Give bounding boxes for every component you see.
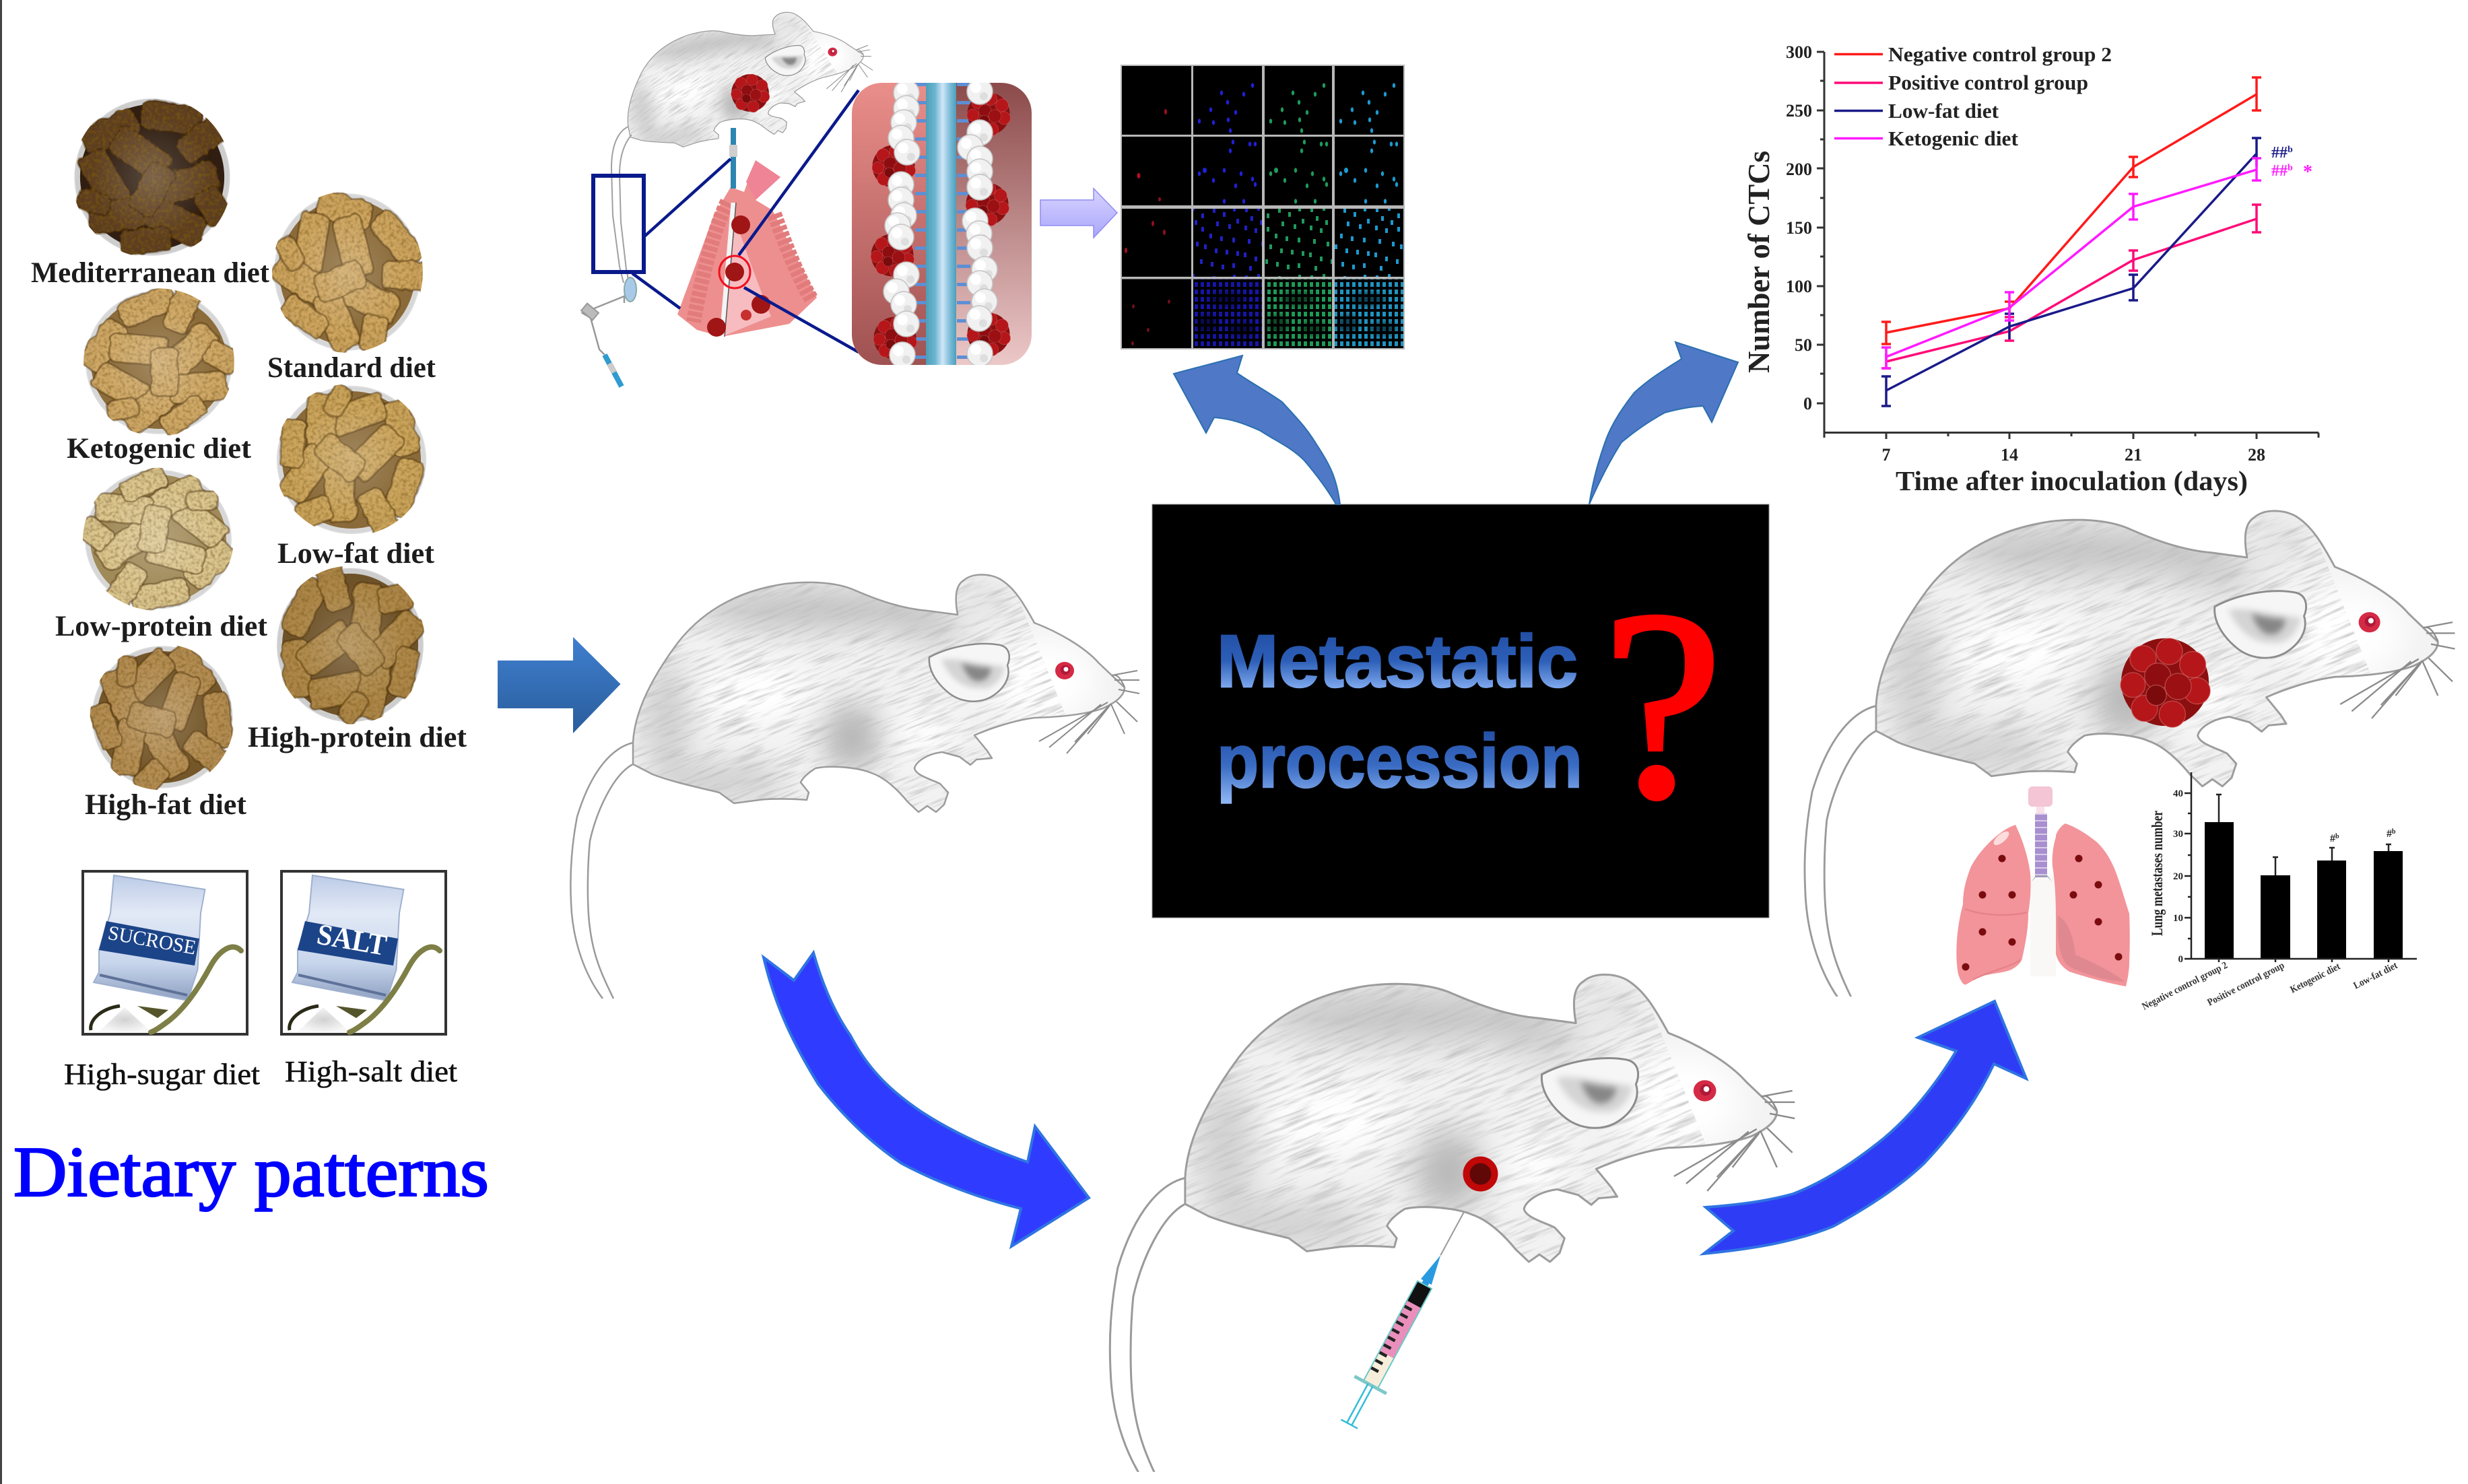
dish: Mediterranean diet [75, 98, 234, 256]
series: ketogenic diet [1881, 158, 2261, 368]
significance marks: # [2387, 828, 2392, 840]
x category labels: Low-fat diet [2352, 960, 2399, 992]
y axis tick labels: 150 [1786, 218, 1812, 238]
x axis tick labels: 14 [2001, 445, 2018, 465]
text: procession: procession [1217, 719, 1582, 803]
text: question mark: ? [1603, 555, 1723, 854]
trachea [2028, 786, 2053, 882]
icon: salt bag [281, 871, 446, 1034]
right lung [2053, 823, 2130, 986]
y axis tick labels: 200 [1786, 160, 1812, 179]
panel: CTC immunofluorescence micrographs [1121, 65, 1405, 349]
significance marks: b [2335, 833, 2339, 840]
panel: metastatic procession box [1152, 504, 1769, 918]
y tick labels: 0 [2178, 954, 2183, 965]
left border line [0, 0, 2, 1484]
left lung [1956, 825, 2031, 984]
antibody beads [883, 79, 997, 368]
significance marks: ## [2271, 162, 2288, 180]
significance marks: * [2303, 162, 2312, 182]
tumour on sampling mouse [731, 74, 770, 112]
significance marks: # [2330, 833, 2335, 844]
micrograph row 4 [1122, 279, 1403, 348]
chart: lung metastases bar chart [2141, 772, 2417, 1013]
y axis tick labels: 0 [1803, 394, 1812, 413]
series: low-fat diet [1881, 138, 2261, 406]
callout box on tail [593, 176, 644, 272]
significance marks [2330, 828, 2396, 844]
icon: sucrose bag: SUCROSE [106, 922, 198, 959]
text: Metastatic: Metastatic [1217, 620, 1578, 703]
significance marks [2271, 144, 2312, 182]
mouse: untreated centre-left [456, 381, 1139, 1023]
x category labels: Negative control group 2 [2141, 960, 2230, 1013]
x axis tick labels [1881, 445, 2265, 465]
label: High-salt diet: High-salt diet [285, 1055, 457, 1088]
error bars and axes [2184, 772, 2417, 962]
micrograph row 3 [1122, 209, 1403, 277]
icon: salt bag: SALT [314, 918, 389, 962]
x axis tick labels: 28 [2248, 445, 2265, 465]
dish: Standard diet [272, 192, 423, 353]
arrow: diets to mouse [498, 637, 621, 733]
tumour: large raspberry [2121, 638, 2210, 727]
significance marks: ## [2271, 144, 2288, 162]
mouse: blood sampling [509, 0, 901, 279]
label: High-protein diet: High-protein diet [248, 722, 467, 753]
chart legend: Negative control group 2 [1888, 42, 2112, 66]
y tick labels: 40 [2173, 788, 2183, 799]
chart axes [1817, 52, 2319, 439]
y axis tick labels: 300 [1786, 42, 1812, 62]
arrow: catheter to micrographs [1040, 189, 1117, 238]
micrograph row 2 [1122, 137, 1403, 205]
x category labels: Ketogenic diet [2289, 962, 2342, 996]
icon: lungs with metastases [1956, 786, 2130, 986]
x category labels: Positive control group [2206, 960, 2286, 1009]
label: Low-protein diet: Low-protein diet [55, 611, 268, 642]
panel: dietary patterns food dishes [31, 98, 467, 821]
tail crop mask upper right [1805, 997, 1865, 1006]
icon: syringe [1333, 1203, 1480, 1433]
mouse: injected [972, 741, 1795, 1484]
significance marks: b [2288, 145, 2293, 155]
mouse tail and catheter [581, 127, 636, 386]
x axis title: Time after inoculation (days) [1896, 465, 2248, 496]
arrow: box to CTC capture [1174, 356, 1340, 504]
dish: High-fat diet [90, 646, 234, 790]
y axis tick labels: 100 [1786, 277, 1812, 296]
dish: Ketogenic diet [84, 288, 234, 436]
chart legend: Ketogenic diet [1888, 127, 2019, 150]
tail crop mask [1131, 1472, 1178, 1484]
label: High-sugar diet: High-sugar diet [64, 1058, 260, 1091]
y axis tick labels [1786, 42, 1812, 413]
chart: number of CTCs line chart [1741, 42, 2319, 496]
dish: Low-fat diet [277, 384, 426, 534]
mouse: tumour-bearing upper right [1674, 287, 2455, 1030]
arrow: injected mouse to lung metastases [1704, 1001, 2026, 1254]
label: Ketogenic diet: Ketogenic diet [67, 433, 252, 465]
y tick labels: 20 [2173, 871, 2183, 882]
arrow: diet mouse to injected mouse [764, 953, 1089, 1246]
y tick labels: 10 [2173, 913, 2183, 924]
series: negative control group 2 [1881, 77, 2261, 344]
label: High-fat diet: High-fat diet [85, 789, 247, 821]
dish: Low-protein diet [83, 467, 233, 611]
chart legend [1834, 42, 2112, 150]
tumour: injection site [1463, 1157, 1498, 1192]
heading: Dietary patterns: Dietary patterns [13, 1133, 489, 1211]
significance marks: b [2392, 828, 2396, 836]
zoom lines [632, 90, 859, 352]
y axis title: Number of CTCs [1741, 151, 1776, 373]
vessel cross-section [677, 160, 817, 337]
significance marks: b [2288, 163, 2293, 173]
y axis tick labels: 250 [1786, 101, 1812, 121]
label: Mediterranean diet: Mediterranean diet [31, 257, 270, 289]
chart legend: Low-fat diet [1888, 99, 1999, 123]
metastasis dots [1962, 855, 2123, 971]
label: Standard diet: Standard diet [267, 352, 436, 384]
catheter into vessel [729, 128, 737, 189]
y axis tick labels: 50 [1795, 335, 1812, 355]
label: Low-fat diet: Low-fat diet [277, 538, 435, 570]
icon: sucrose bag [83, 871, 247, 1034]
y tick labels [2173, 788, 2183, 965]
series: positive control group [1881, 205, 2261, 368]
x category labels [2141, 960, 2399, 1013]
x axis tick labels: 21 [2125, 445, 2142, 465]
captured tumour cells [871, 93, 1011, 360]
dish: High-protein diet [277, 566, 424, 724]
x axis tick labels: 7 [1881, 445, 1891, 465]
arrow: box to CTC chart [1589, 342, 1738, 504]
panel: catheter capturing tumour cells [852, 79, 1032, 368]
bars [2205, 822, 2403, 959]
y tick labels: 30 [2173, 829, 2183, 840]
y axis title: Lung metastases number [2149, 811, 2166, 936]
chart legend: Positive control group [1888, 71, 2088, 94]
micrograph row 1 [1122, 66, 1403, 135]
